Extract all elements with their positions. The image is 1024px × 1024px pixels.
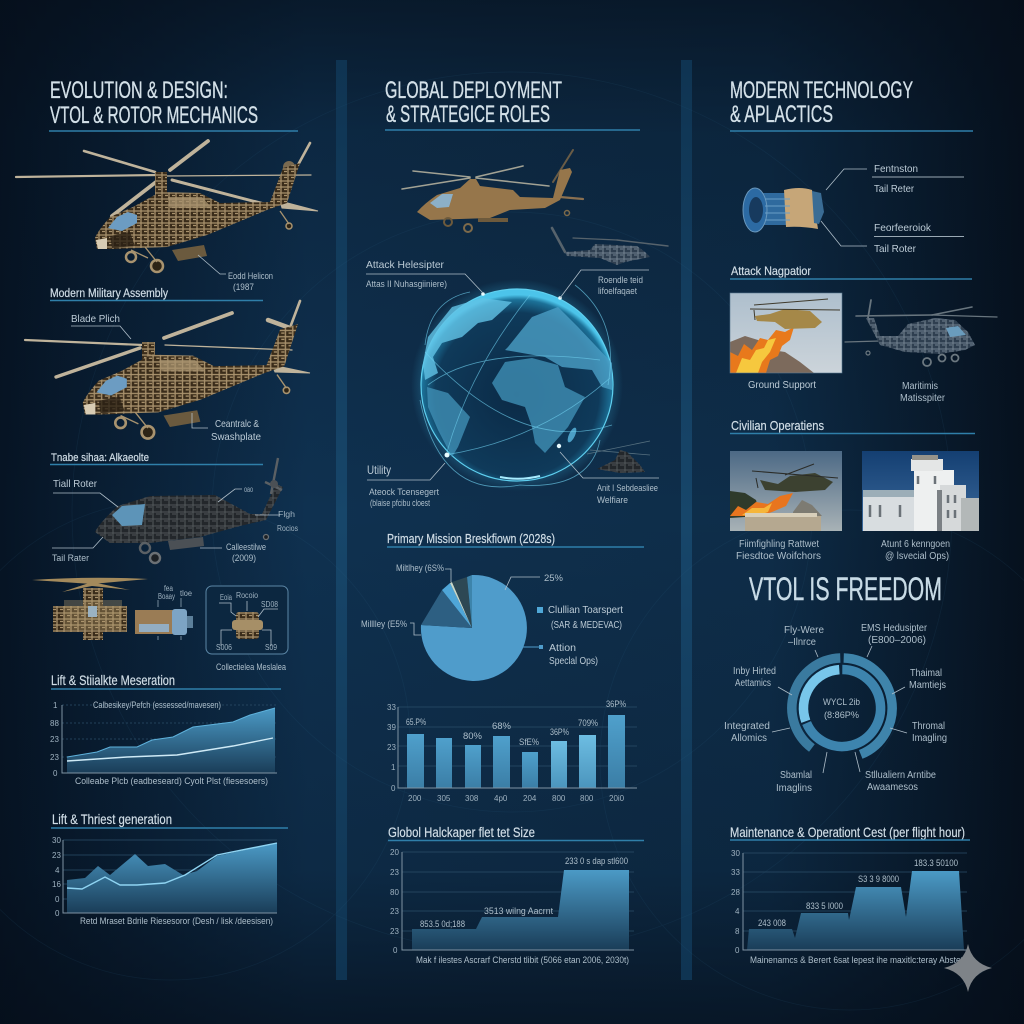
area chart: global fleet size: 80 <box>390 888 399 897</box>
pie legend: (SAR & MEDEVAC) <box>551 619 622 631</box>
donut chart: Mamtiejs <box>909 680 946 691</box>
subheading: modern military assembly: Modern Military Assembly <box>50 288 168 300</box>
callout: anti submarine warfare: Welfiare <box>597 495 628 505</box>
caption: maritime helicopter <box>900 381 946 404</box>
callout: attack helicopter <box>366 259 483 293</box>
chart: lift and stroke: 23 <box>50 735 59 744</box>
callout: early helicopter <box>198 255 273 292</box>
photo: ground support <box>730 293 842 373</box>
chart: lift and stroke: Lift & Stiialkte Meseration <box>51 672 175 688</box>
donut chart: WYCL 2ib <box>823 697 860 707</box>
bar chart: 1 <box>391 763 396 772</box>
area chart: maintenance cost: 0 <box>735 946 740 955</box>
caption: special ops: @ lsvecial Ops) <box>885 551 949 562</box>
panel: collective mechanism inset: Rocoio <box>236 591 258 600</box>
area chart: global fleet size: 23 <box>390 907 399 916</box>
chart: lift and thrust: 23 <box>52 851 61 860</box>
area chart: global fleet size <box>388 825 644 965</box>
callout: blade pitch: Blade Plich <box>71 313 120 325</box>
donut chart: Allomics <box>731 733 767 744</box>
pie chart: primary mission breakdown: 25% <box>544 573 563 583</box>
callouts: dark gunship: Tail Rater <box>52 553 89 563</box>
callouts: dark gunship <box>52 478 298 563</box>
helicopter illustration: dark gunship <box>95 458 283 563</box>
pie legend: Attion <box>549 642 576 654</box>
bar chart: 36P% <box>606 699 626 709</box>
chart: lift and stroke: 88 <box>50 719 59 728</box>
photo: building and tower <box>862 451 979 531</box>
donut chart: Inby Hirted <box>733 666 776 677</box>
chart: lift and thrust: 30 <box>52 836 61 845</box>
callout: swashplate: Ceantralc & <box>215 418 259 430</box>
area chart: global fleet size: Globol Halckaper flet tet Size <box>388 825 535 840</box>
callout: anti submarine warfare: Anit I Sebdeasliee <box>597 483 658 493</box>
donut chart <box>724 623 947 794</box>
icon: gearbox cutaway: fea <box>164 584 173 593</box>
pie legend: Clullian Toarspert <box>548 604 623 616</box>
area chart: global fleet size: 23 <box>390 868 399 877</box>
area chart: maintenance cost: Maintenance & Operationt Cest (per flight hour) <box>730 824 965 840</box>
bar chart: 36P% <box>550 727 569 737</box>
heading: modern technology <box>730 77 973 131</box>
caption: ground support: Ground Support <box>748 379 816 391</box>
panel: global deployment <box>361 77 668 965</box>
icon: gearbox cutaway: Boaay <box>158 592 175 601</box>
callouts: dark gunship: Flgh <box>278 510 295 519</box>
callouts: ducted fan: Fentnston <box>874 163 918 175</box>
callouts: ducted fan: Tail Roter <box>874 243 916 255</box>
donut chart: EMS Hedusipter <box>861 623 928 634</box>
bar chart: 0 <box>391 784 396 793</box>
helicopter illustration: tan attack helicopter <box>402 150 583 232</box>
icon: wireframe helicopter <box>587 441 650 473</box>
heading: modern technology: & APLACTICS <box>730 101 833 128</box>
caption: special ops: Atunt 6 kenngoen <box>881 539 950 550</box>
area chart: maintenance cost: 833 5 I000 <box>806 901 843 911</box>
area chart: maintenance cost: 33 <box>731 868 740 877</box>
donut chart: Integrated <box>724 721 770 732</box>
icon: sparkle watermark <box>944 944 992 992</box>
callout: utility: Ateock Tcensegert <box>369 487 439 497</box>
donut chart: –Ilnrce <box>788 637 816 648</box>
area chart: global fleet size: 853.5 0d;188 <box>420 919 465 929</box>
bar chart <box>387 699 637 803</box>
callout: utility <box>367 463 445 508</box>
area chart: maintenance cost: 8 <box>735 927 740 936</box>
panel: collective mechanism inset <box>206 586 288 654</box>
bar chart: 80% <box>463 731 482 741</box>
chart: lift and thrust: Lift & Thriest generation <box>52 811 172 827</box>
caption: firefighting: Fiimfighling Rattwet <box>739 539 819 550</box>
donut chart: (E800–2006) <box>868 635 926 646</box>
panel: collective mechanism inset: S006 <box>216 643 232 652</box>
bar chart: 200 <box>408 794 422 803</box>
caption: special ops <box>881 539 950 562</box>
donut chart: Imagling <box>912 733 947 744</box>
callout: rounded transport <box>560 270 649 298</box>
donut chart: Thromal <box>912 721 945 732</box>
area chart: global fleet size: 3513 wilng Aacrnt <box>484 906 553 916</box>
callout: anti submarine warfare <box>560 452 659 505</box>
callout: attack helicopter: Attack Helesipter <box>366 259 444 271</box>
pie chart: primary mission breakdown: Milllley (E5% <box>361 619 407 629</box>
callout: rounded transport: Roendle teid <box>598 275 643 285</box>
helicopter illustration: maritime helicopter <box>845 300 997 366</box>
chart: lift and thrust: Retd Mraset Bdrile Riesesoror (Desh / lisk /deesisen) <box>80 916 273 926</box>
callouts: dark gunship: (2009) <box>232 553 256 563</box>
donut chart: (8:86P% <box>824 710 859 720</box>
callouts: ducted fan <box>821 163 964 255</box>
chart: lift and thrust: 4 <box>55 866 60 875</box>
caption: collective mechanism: Collectielea Meslalea <box>216 662 286 672</box>
bar chart: 39 <box>387 723 396 732</box>
caption: firefighting <box>736 539 821 562</box>
bar chart: 65.P% <box>406 717 426 727</box>
chart: lift and thrust: 0 <box>55 895 60 904</box>
chart: lift and thrust <box>51 811 288 926</box>
bar chart: 709% <box>578 718 598 728</box>
heading: modern technology: MODERN TECHNOLOGY <box>730 77 913 104</box>
pie legend <box>523 604 623 667</box>
pie chart: primary mission breakdown: Primary Mission Breskfiown (2028s) <box>387 532 555 546</box>
panel: collective mechanism inset: SD08 <box>261 600 278 609</box>
callout: utility: (blaise pfcibu cloest <box>370 498 430 508</box>
bar chart: 4p0 <box>494 794 508 803</box>
helicopter illustration: early cutaway <box>16 141 318 272</box>
helicopter illustration: modern assembly <box>25 301 310 439</box>
pie legend: Speclal Ops) <box>549 655 598 667</box>
donut chart: Awaamesos <box>867 782 918 793</box>
chart: lift and thrust: 16 <box>52 880 61 889</box>
heading: global deployment: GLOBAL DEPLOYMENT <box>385 77 562 104</box>
donut chart: Thaimal <box>910 668 942 679</box>
bar chart: 33 <box>387 703 396 712</box>
icon: gearbox cutaway: tloe <box>180 589 193 598</box>
icon: ducted tail fan <box>743 188 824 232</box>
callouts: dark gunship: Tiall Roter <box>53 478 97 490</box>
bar chart: 20i0 <box>609 794 625 803</box>
heading: evolution and design: EVOLUTION & DESIGN: <box>50 77 228 104</box>
heading: global deployment: & STRATEGICE ROLES <box>386 101 550 128</box>
area chart: global fleet size: 233 0 s dap stl600 <box>565 856 628 866</box>
area chart: global fleet size: 23 <box>390 927 399 936</box>
callout: attack helicopter: Attas II Nuhasgiiniere) <box>366 279 447 289</box>
callouts: dark gunship: Rocios <box>277 524 298 533</box>
panel: evolution and design <box>16 77 318 926</box>
panel: modern technology <box>724 77 997 965</box>
caption: firefighting: Fiesdtoe Woifchors <box>736 551 821 562</box>
callout: early helicopter: Eodd Helicon <box>228 271 273 281</box>
area chart: global fleet size: 20 <box>390 848 399 857</box>
chart: lift and thrust: 0 <box>55 909 60 918</box>
callout: swashplate: Swashplate <box>211 431 261 443</box>
area chart: maintenance cost <box>730 824 970 965</box>
callout: blade pitch <box>71 313 131 339</box>
caption: maritime helicopter: Matisspiter <box>900 393 946 404</box>
callout: rounded transport: lifoelfaqaet <box>598 286 637 296</box>
chart: lift and stroke: 1 <box>53 701 58 710</box>
bar chart: 68% <box>492 721 511 731</box>
bar chart: 800 <box>552 794 566 803</box>
pie chart: primary mission breakdown: Miltlhey (6S% <box>396 563 444 573</box>
callouts: ducted fan: Tail Reter <box>874 183 914 195</box>
subheading: civilian operations: Civilian Operatiens <box>731 419 824 433</box>
area chart: maintenance cost: Mainenamcs & Berert 6sat lepest ihe maxitlc:teray Abstet <box>750 955 963 965</box>
bar chart: 23 <box>387 743 396 752</box>
donut chart: Imaglins <box>776 783 812 794</box>
area chart: maintenance cost: 28 <box>731 888 740 897</box>
bar chart: 204 <box>523 794 537 803</box>
icon: gearbox cutaway <box>135 584 193 640</box>
area chart: maintenance cost: 4 <box>735 907 740 916</box>
chart: lift and stroke <box>50 672 281 786</box>
subheading: attack navigation: Attack Nagpatior <box>731 264 811 278</box>
bar chart: 800 <box>580 794 594 803</box>
area chart: maintenance cost: 183.3 50100 <box>914 858 958 868</box>
donut chart: Sbamlal <box>780 770 812 781</box>
panel: collective mechanism inset: S09 <box>265 643 277 652</box>
caption: maritime helicopter: Maritimis <box>902 381 938 392</box>
heading: global deployment <box>385 77 640 130</box>
chart: lift and stroke: 0 <box>53 769 58 778</box>
photo: firefighting <box>730 451 842 531</box>
donut chart: Fly-Were <box>784 625 824 636</box>
chart: lift and stroke: Calbesikey/Pefch (essessed/mavesen) <box>93 700 221 710</box>
donut chart: Aettamics <box>735 678 771 689</box>
panel: collective mechanism inset: Eoia <box>220 593 232 602</box>
area chart: maintenance cost: 243 008 <box>758 918 786 928</box>
callout: early helicopter: (1987 <box>233 282 254 292</box>
heading: evolution and design <box>49 77 298 131</box>
callouts: ducted fan: Feorfeeroiok <box>874 222 932 234</box>
donut chart: Stllualiern Arntibe <box>865 770 936 781</box>
area chart: global fleet size: Mak f ilestes Ascrarf Cherstd tlibit (5066 etan 2006, 2030t) <box>416 955 629 965</box>
area chart: maintenance cost: 30 <box>731 849 740 858</box>
chart: lift and stroke: 23 <box>50 753 59 762</box>
subheading: tail assembly: Tnabe sihaa: Alkaeolte <box>51 452 149 464</box>
bar chart: 305 <box>437 794 451 803</box>
heading: evolution and design: VTOL & ROTOR MECHANICS <box>50 102 258 129</box>
callout: swashplate <box>192 413 261 443</box>
area chart: maintenance cost: S3 3 9 8000 <box>858 874 899 884</box>
helicopter illustration: dark utility helicopter <box>552 228 668 265</box>
callouts: dark gunship: Calleestilwe <box>226 542 266 552</box>
area chart: global fleet size: 0 <box>393 946 398 955</box>
chart: lift and stroke: Colleabe Plcb (eadbeseard) Cyolt Plst (fiesesoers) <box>75 776 268 786</box>
icon: front view rotor assembly <box>32 578 148 640</box>
callout: utility: Utility <box>367 463 391 477</box>
bar chart: 308 <box>465 794 479 803</box>
globe <box>411 279 623 491</box>
bar chart: SfE% <box>519 737 539 747</box>
pie chart: primary mission breakdown <box>361 532 644 681</box>
callouts: dark gunship: oao <box>244 485 253 494</box>
